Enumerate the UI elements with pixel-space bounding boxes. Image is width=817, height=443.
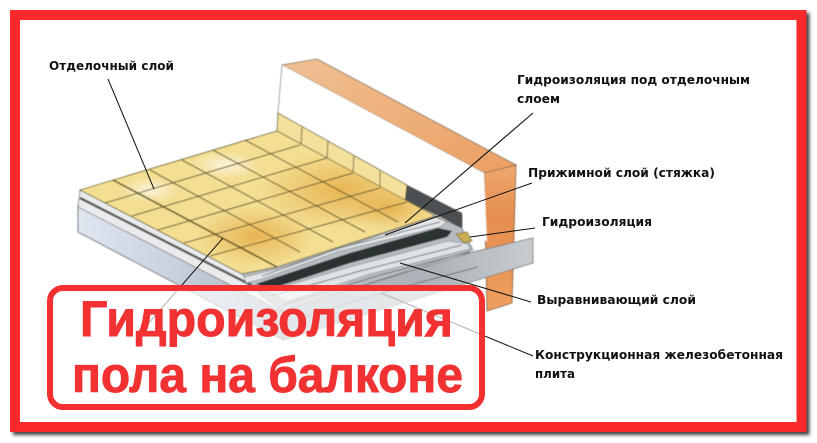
title box xyxy=(50,288,482,407)
leader: levelling layer xyxy=(400,263,531,302)
left side layers xyxy=(78,190,283,312)
label: waterproofing under finish layer xyxy=(517,72,750,106)
wall top cap xyxy=(282,59,516,173)
title line 1: Гидроизоляция xyxy=(80,291,453,347)
screed grey streak xyxy=(262,222,440,276)
screed white band xyxy=(244,217,447,283)
label: waterproofing under finish layer: слоем xyxy=(517,91,560,106)
leader: waterproofing under finish xyxy=(405,113,533,223)
label: waterproofing under finish layer: Гидроизоляция под отделочным xyxy=(517,72,750,87)
title line 2: пола на балконе xyxy=(72,347,463,403)
leader: finish layer lower xyxy=(147,238,223,325)
tile grid joints xyxy=(105,140,407,256)
skirting joints xyxy=(301,127,380,188)
wall left edge xyxy=(278,65,282,113)
tile colour variation xyxy=(120,151,436,266)
levelling white band xyxy=(268,241,470,302)
bold tile joint xyxy=(113,180,277,267)
leader: finish layer upper xyxy=(108,79,154,189)
illustration: balcony floor cross-section xyxy=(78,59,533,340)
leader: waterproofing xyxy=(470,228,535,237)
leader: concrete slab xyxy=(381,293,533,356)
label: screed: Прижимной слой (стяжка) xyxy=(528,165,715,180)
label: waterproofing: Гидроизоляция xyxy=(542,214,652,229)
label: levelling layer: Выравнивающий слой xyxy=(537,292,696,307)
brick wall end face xyxy=(484,165,516,311)
yellow waterproof edge xyxy=(456,232,472,243)
label: reinforced concrete slab: Конструкционная железобетонная xyxy=(535,347,783,362)
floor tile surface xyxy=(80,131,435,274)
levelling grey streaks xyxy=(272,245,478,318)
leader: screed xyxy=(385,183,532,235)
concrete slab left face xyxy=(78,205,283,340)
label: finish layer: Отделочный слой xyxy=(49,58,174,73)
label: reinforced concrete slab: плита xyxy=(535,366,575,381)
skirting tile strip xyxy=(277,113,407,202)
dark stripe on left side xyxy=(80,198,262,291)
leader lines xyxy=(108,79,535,356)
white wall face xyxy=(278,65,487,242)
right side layered base xyxy=(242,216,473,311)
title box background and border xyxy=(50,288,482,407)
concrete slab right face and beam xyxy=(283,238,533,340)
waterproofing black band xyxy=(256,228,452,289)
label: reinforced concrete slab xyxy=(535,347,783,381)
black vertical waterproofing strip xyxy=(405,185,462,228)
